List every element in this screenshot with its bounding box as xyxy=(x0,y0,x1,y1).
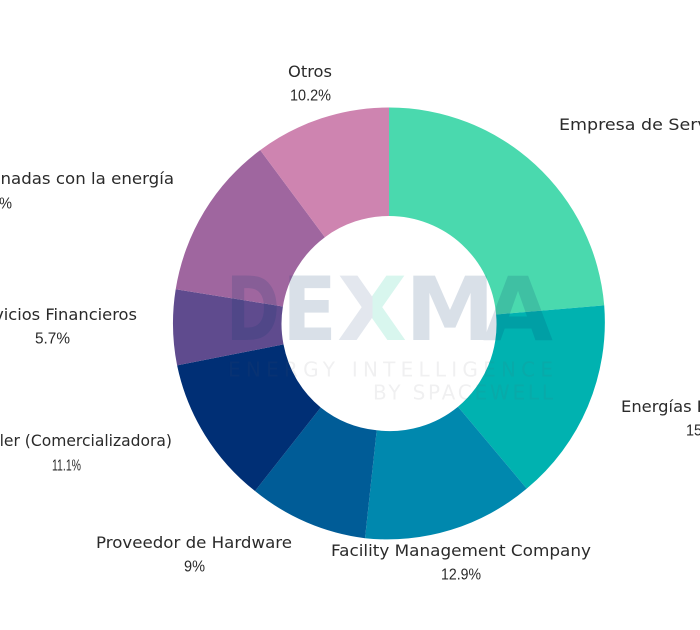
label: empresas relacionadas con la energía xyxy=(0,169,174,212)
slice: Energías Renovables xyxy=(458,305,605,489)
label: Energías Renovables xyxy=(621,397,700,440)
label: Servicios Financieros xyxy=(0,305,137,348)
slice: Retailer (Comercializadora) xyxy=(177,344,321,491)
label: Proveedor de Hardware: Proveedor de Hardware xyxy=(96,533,292,552)
slice: Otros xyxy=(260,108,389,237)
donut chart xyxy=(173,108,605,539)
slice: Empresa de Servicios Energéticos xyxy=(389,108,604,314)
label: Facility Management Company: Facility Management Company xyxy=(331,541,591,560)
watermark: DEXMA logo: ENERGY INTELLIGENCE xyxy=(228,358,553,382)
slice: empresas relacionadas con la energía xyxy=(176,150,325,306)
watermark: DEXMA logo: X xyxy=(337,258,407,361)
watermark: DEXMA logo: D xyxy=(226,258,280,361)
label: Proveedor de Hardware xyxy=(96,533,292,576)
slice: Servicios Financieros xyxy=(173,289,284,365)
watermark: DEXMA logo: X xyxy=(337,258,407,361)
label: Otros: 10.2% xyxy=(290,88,331,104)
watermark: DEXMA logo: BY SPACEWELL xyxy=(373,380,554,404)
label: Proveedor de Hardware: 9% xyxy=(184,558,205,576)
watermark: DEXMA logo: M xyxy=(405,258,495,361)
label: Otros: Otros xyxy=(288,62,332,81)
label: Otros xyxy=(288,62,332,104)
watermark: DEXMA logo xyxy=(232,276,552,400)
label: Retailer (Comercializadora): 11.1% xyxy=(52,458,81,474)
label: Facility Management Company xyxy=(331,541,591,584)
label: Facility Management Company: 12.9% xyxy=(441,566,481,584)
slice: Facility Management Company xyxy=(365,407,527,539)
watermark: DEXMA logo: A xyxy=(483,258,553,361)
label: Servicios Financieros: 5.7% xyxy=(35,330,70,348)
watermark: DEXMA logo: E xyxy=(282,258,337,361)
label: Retailer (Comercializadora) xyxy=(0,431,172,474)
slice: Proveedor de Hardware xyxy=(255,408,377,538)
